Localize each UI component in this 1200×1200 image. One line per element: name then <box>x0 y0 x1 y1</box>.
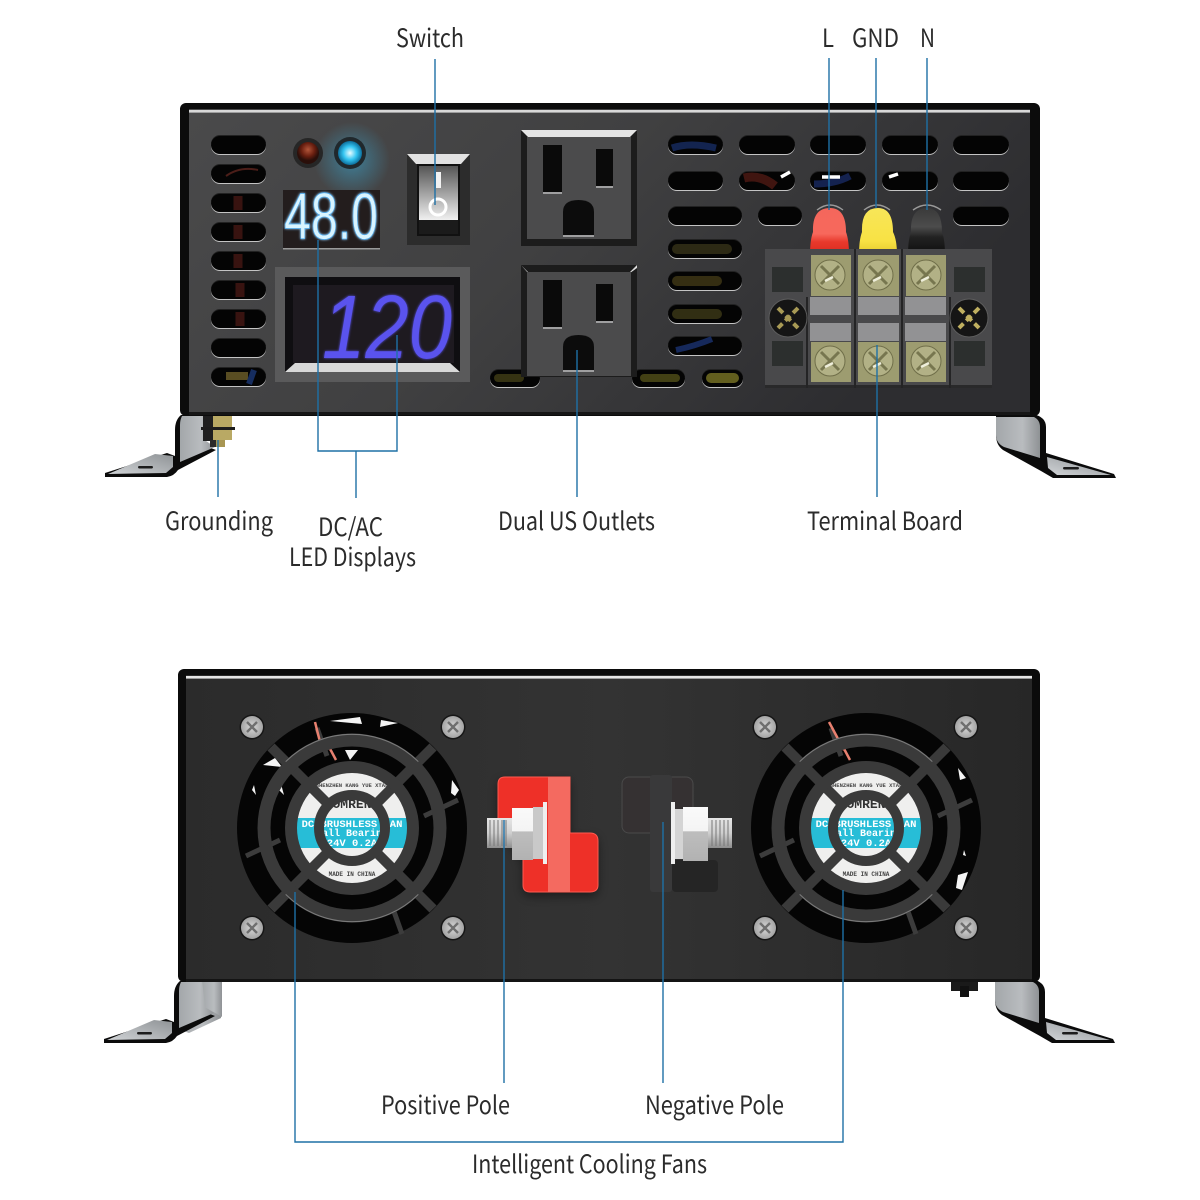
label: GND: GND <box>852 19 899 55</box>
cooling fan, left <box>237 713 467 943</box>
red lug <box>810 208 849 255</box>
label: Switch: Switch <box>396 19 464 55</box>
fan hub label <box>810 772 922 884</box>
label: Positive Pole: Positive Pole <box>381 1086 510 1122</box>
label: Dual US Outlets: Dual US Outlets <box>498 502 655 538</box>
crimped wire lugs <box>810 205 945 255</box>
fan hub label: OMREN <box>846 797 886 812</box>
US outlet, top <box>521 130 637 246</box>
label: DC/AC LED Displays <box>289 508 416 574</box>
indicator lights <box>293 122 390 198</box>
metal case <box>180 103 1040 416</box>
front right mounting foot <box>996 414 1116 478</box>
label: Terminal Board: Terminal Board <box>807 502 963 538</box>
callout lines: rear view <box>295 820 843 1142</box>
side mounting screws <box>769 299 988 337</box>
fan hub label <box>296 772 408 884</box>
mounting screws <box>240 714 978 940</box>
fan hub label: Ball Bearing <box>830 828 902 840</box>
negative pole terminal <box>622 775 732 892</box>
AC voltage display: 120 <box>322 278 452 378</box>
rear left mounting foot <box>104 980 222 1043</box>
label: Grounding: Grounding <box>165 502 273 538</box>
rear right mounting foot <box>995 979 1115 1043</box>
label: DC/AC LED Displays: LED Displays <box>289 538 416 574</box>
ventilation slots <box>211 136 1009 387</box>
cooling fan, right <box>751 713 981 943</box>
fan hub label: OMREN <box>332 797 372 812</box>
US outlet, bottom <box>521 265 637 377</box>
callout lines: front view <box>218 58 927 498</box>
fan hub label: 24V 0.2A <box>327 838 378 850</box>
DC voltage display: 48.0 <box>284 179 378 253</box>
fan hub label: MADE IN CHINA <box>329 871 376 878</box>
fan hub label: DC BRUSHLESS FAN <box>816 819 916 831</box>
fan hub label: 24V 0.2A <box>841 838 892 850</box>
grounding stud <box>201 416 235 447</box>
yellow lug <box>859 208 897 255</box>
fan hub label: Ball Bearing <box>316 828 388 840</box>
label: DC/AC LED Displays: DC/AC <box>318 508 383 544</box>
rear grounding stud <box>951 982 978 997</box>
wires visible through the slots <box>226 145 850 384</box>
label: N: N <box>920 19 935 55</box>
rocker switch <box>407 154 470 245</box>
bolt and nut <box>671 802 732 864</box>
fan hub label: SHENZHEN KANG YUE XTAL <box>316 782 389 789</box>
top edge highlight <box>186 676 1032 679</box>
panel: rear view of the inverter <box>104 669 1115 1043</box>
label: L: L <box>822 19 834 55</box>
bolt and nut <box>487 802 547 864</box>
metal case <box>178 669 1040 982</box>
label: Negative Pole: Negative Pole <box>645 1086 784 1122</box>
terminal board <box>765 249 992 388</box>
label: Intelligent Cooling Fans: Intelligent Cooling Fans <box>472 1145 707 1181</box>
fan hub label: MADE IN CHINA <box>843 871 890 878</box>
fan hub label: DC BRUSHLESS FAN <box>302 819 402 831</box>
fan hub label: SHENZHEN KANG YUE XTAL <box>830 782 903 789</box>
AC voltage display <box>275 267 470 382</box>
panel: front view of the inverter <box>105 103 1116 478</box>
top edge highlight <box>189 110 1030 113</box>
black lug <box>908 208 945 255</box>
front left mounting foot <box>105 415 216 477</box>
positive pole terminal <box>487 777 598 896</box>
